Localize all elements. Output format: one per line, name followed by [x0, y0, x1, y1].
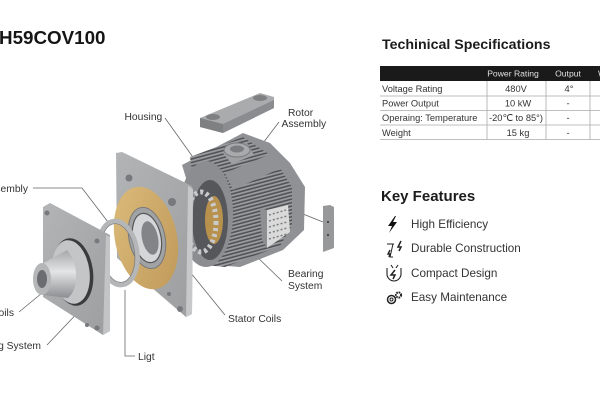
icon: small side plate — [323, 205, 334, 252]
feature: high efficiency: High Efficiency — [411, 218, 488, 231]
label: Stator Coils: Stator Coils — [228, 314, 281, 325]
icon: shield with bolt — [387, 265, 401, 281]
label: Housing: Housing — [124, 112, 163, 123]
specifications table: 4° — [565, 84, 574, 94]
icon: top bracket — [200, 93, 274, 133]
specifications table: Output — [555, 68, 582, 78]
motor housing — [179, 133, 305, 267]
label: Rotor Assembly: Rotor — [288, 108, 314, 119]
front plate with hub — [33, 203, 110, 335]
label: Bearing System: Bearing — [288, 269, 324, 280]
specifications table: 10 kW — [505, 98, 531, 108]
icon: bolts and brackets — [387, 241, 401, 257]
specifications table — [380, 66, 600, 140]
thin ring gasket — [95, 219, 141, 287]
title: H59COV100 — [0, 27, 106, 48]
specifications table: 480V — [505, 84, 528, 94]
feature: durable construction: Durable Construction — [411, 242, 521, 255]
specifications table: Operaing: Temperature — [382, 113, 477, 123]
icon: lightning bolt — [388, 216, 397, 233]
heading: key features: Key Features — [381, 188, 475, 205]
label: Bearing System: System — [288, 281, 322, 292]
specifications table: Weight — [382, 128, 411, 138]
feature: compact design: Compact Design — [411, 267, 497, 280]
specifications table: 15 kg — [507, 128, 529, 138]
label: Ligt: Ligt — [138, 352, 155, 363]
specifications table: Power Output — [382, 98, 439, 108]
icon: gears — [388, 292, 401, 304]
specifications table: - — [566, 128, 570, 138]
middle plate with gold ring — [105, 152, 193, 317]
icon: terminal box — [260, 205, 290, 248]
feature: durable construction — [387, 241, 521, 257]
heading: technical specifications: Techinical Specifications — [382, 37, 551, 53]
specifications table: Power Rating — [487, 68, 539, 78]
label: Rotor Assembly: Assembly — [282, 119, 327, 130]
leader lines — [19, 118, 323, 356]
feature: high efficiency — [388, 216, 488, 233]
feature: compact design — [387, 265, 497, 281]
specifications table: Voltage Rating — [382, 84, 442, 94]
feature: easy maintenance: Easy Maintenance — [411, 291, 507, 304]
specifications table: - — [566, 113, 570, 123]
specifications table: - — [566, 98, 570, 108]
specifications table: -20℃ to 85°) — [489, 113, 543, 123]
